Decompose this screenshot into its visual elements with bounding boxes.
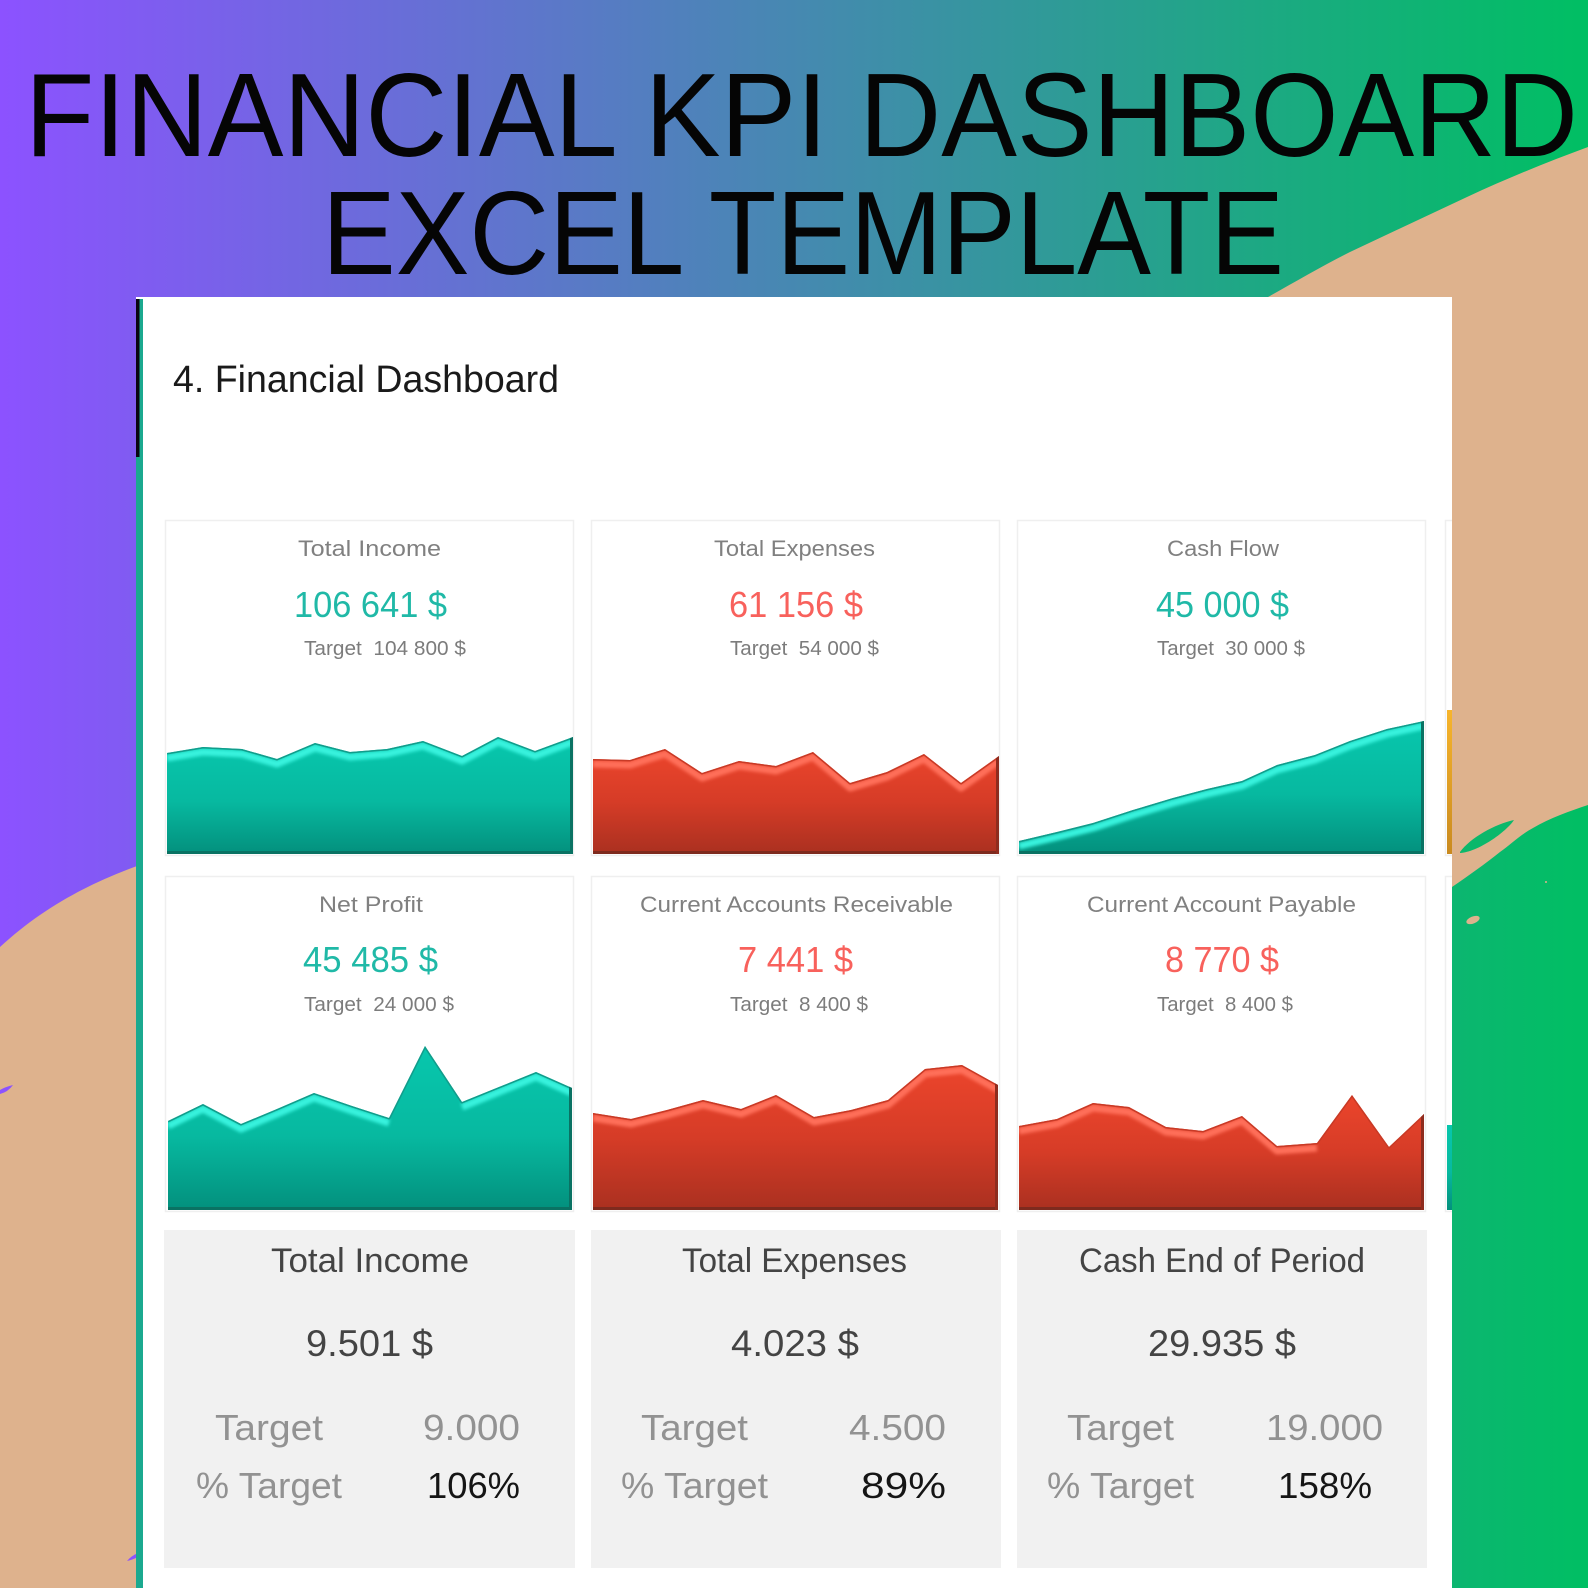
card: Current Accounts Receivable KPI: 7 441 $ xyxy=(738,939,853,980)
card: Net Profit KPI: Net Profit xyxy=(319,892,423,917)
card: Cash Flow KPI xyxy=(1018,520,1426,856)
card: cropped fourth card, row 1 xyxy=(1446,520,1452,856)
summary panel: Cash End of Period xyxy=(1017,1230,1427,1568)
summary panel: Total Expenses: 89% xyxy=(861,1465,946,1506)
decoration: green leaf xyxy=(1460,820,1514,853)
panel: dashboard screenshot xyxy=(136,297,1452,1588)
teal chart sliver xyxy=(1447,1125,1452,1210)
card: Current Account Payable KPI: Current Account Payable xyxy=(1087,892,1356,917)
card: Current Accounts Receivable KPI: Target 8 400 $ xyxy=(730,994,868,1016)
card: Total Income KPI: Total Income xyxy=(298,536,441,561)
summary panel: Cash End of Period: 29.935 $ xyxy=(1148,1323,1296,1364)
card: Total Expenses KPI: Total Expenses xyxy=(714,536,875,561)
decoration: purple leaf left xyxy=(0,1085,13,1094)
summary panel: Cash End of Period: Target xyxy=(1067,1407,1174,1448)
area chart: Total Income xyxy=(167,730,573,854)
area chart: Cash Flow xyxy=(1019,715,1424,854)
area chart: Net Profit xyxy=(168,1046,572,1210)
background shape: tan upper right xyxy=(1268,147,1588,897)
card: Total Expenses KPI: 61 156 $ xyxy=(729,584,863,625)
card: cropped fourth card, row 2 xyxy=(1446,876,1452,1212)
summary panel: Total Income: % Target xyxy=(196,1465,342,1506)
summary panel: Cash End of Period: 19.000 xyxy=(1266,1407,1383,1448)
summary panel: Total Expenses: % Target xyxy=(621,1465,768,1506)
card: Total Income KPI xyxy=(166,520,574,856)
card: Cash Flow KPI: Target 30 000 $ xyxy=(1157,638,1305,660)
title: EXCEL TEMPLATE xyxy=(322,167,1284,300)
summary panel: Total Expenses: Total Expenses xyxy=(682,1242,907,1280)
area chart: Total Expenses xyxy=(593,749,999,854)
dashboard heading: 4. Financial Dashboard xyxy=(173,359,559,401)
yellow chart sliver xyxy=(1447,710,1452,854)
summary panel: Cash End of Period: % Target xyxy=(1047,1465,1194,1506)
card: Net Profit KPI xyxy=(166,876,574,1212)
decoration: tiny dot xyxy=(1545,881,1547,883)
decoration: purple leaf bottom xyxy=(127,1553,138,1561)
summary panel: Total Income xyxy=(164,1230,575,1568)
summary panel: Total Income: Total Income xyxy=(271,1242,469,1280)
card: Cash Flow KPI: 45 000 $ xyxy=(1156,584,1289,625)
area chart: Current Accounts Receivable xyxy=(593,1065,998,1210)
summary panel: Cash End of Period: Cash End of Period xyxy=(1079,1242,1365,1280)
card: Current Account Payable KPI xyxy=(1018,876,1426,1212)
card: Total Expenses KPI: Target 54 000 $ xyxy=(730,638,879,660)
card: Current Accounts Receivable KPI: Current Accounts Receivable xyxy=(640,892,953,917)
panel left black stripe xyxy=(136,299,140,457)
summary panel: Total Income: 9.501 $ xyxy=(306,1323,433,1364)
summary panel: Total Expenses: Target xyxy=(641,1407,748,1448)
card: Total Expenses KPI xyxy=(592,520,1000,856)
card: Net Profit KPI: 45 485 $ xyxy=(303,939,438,980)
summary panel: Total Income: 9.000 xyxy=(423,1407,520,1448)
summary panel: Total Income: 106% xyxy=(427,1465,520,1506)
card: Total Income KPI: Target 104 800 $ xyxy=(304,638,466,660)
title xyxy=(25,49,1578,300)
card: Net Profit KPI: Target 24 000 $ xyxy=(304,994,454,1016)
summary panel: Total Expenses xyxy=(591,1230,1001,1568)
summary panel: Total Expenses: 4.500 xyxy=(849,1407,946,1448)
summary panel: Cash End of Period: 158% xyxy=(1278,1465,1372,1506)
card: Total Income KPI: 106 641 $ xyxy=(294,584,447,625)
card: Cash Flow KPI: Cash Flow xyxy=(1167,536,1279,561)
background shape: tan lower left xyxy=(0,860,160,1588)
summary panel: Total Income: Target xyxy=(215,1407,323,1448)
decoration: tan spot xyxy=(1465,914,1481,926)
card: Current Accounts Receivable KPI xyxy=(592,876,1000,1212)
area chart: Current Account Payable xyxy=(1019,1095,1424,1210)
card: Current Account Payable KPI: Target 8 400 $ xyxy=(1157,994,1293,1016)
card: Current Account Payable KPI: 8 770 $ xyxy=(1165,939,1279,980)
panel left teal stripe xyxy=(136,299,143,1588)
summary panel: Total Expenses: 4.023 $ xyxy=(731,1323,859,1364)
